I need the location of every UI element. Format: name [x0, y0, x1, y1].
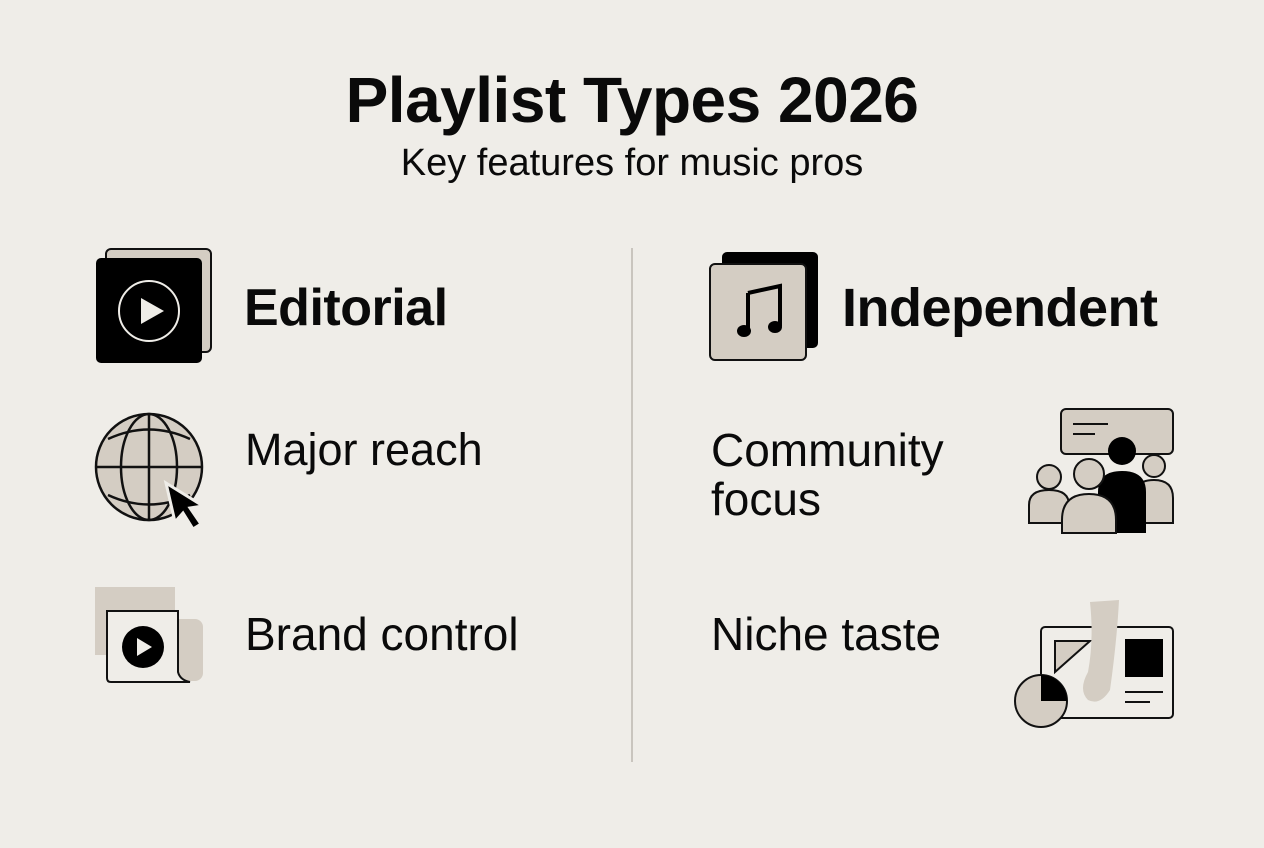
text: Community focus: Community	[711, 424, 944, 476]
heading: Independent: Independent	[842, 278, 1158, 338]
icon: brand control card	[95, 587, 203, 682]
text: Community focus	[711, 424, 944, 525]
subtitle: Key features for music pros	[401, 142, 863, 184]
text: Brand control: Brand control	[245, 608, 519, 660]
text: Major reach: Major reach	[245, 424, 483, 475]
icon: independent music card	[710, 252, 818, 360]
icon: globe with cursor	[96, 414, 203, 529]
icon: editorial play card	[96, 249, 211, 363]
icon: community group	[1029, 409, 1173, 533]
heading: Editorial: Editorial	[244, 279, 448, 337]
divider	[631, 248, 633, 762]
title: Playlist Types 2026	[346, 64, 918, 136]
icon: niche taste collage	[1015, 600, 1173, 727]
text: Community focus: focus	[711, 473, 821, 525]
text: Niche taste: Niche taste	[711, 608, 941, 660]
